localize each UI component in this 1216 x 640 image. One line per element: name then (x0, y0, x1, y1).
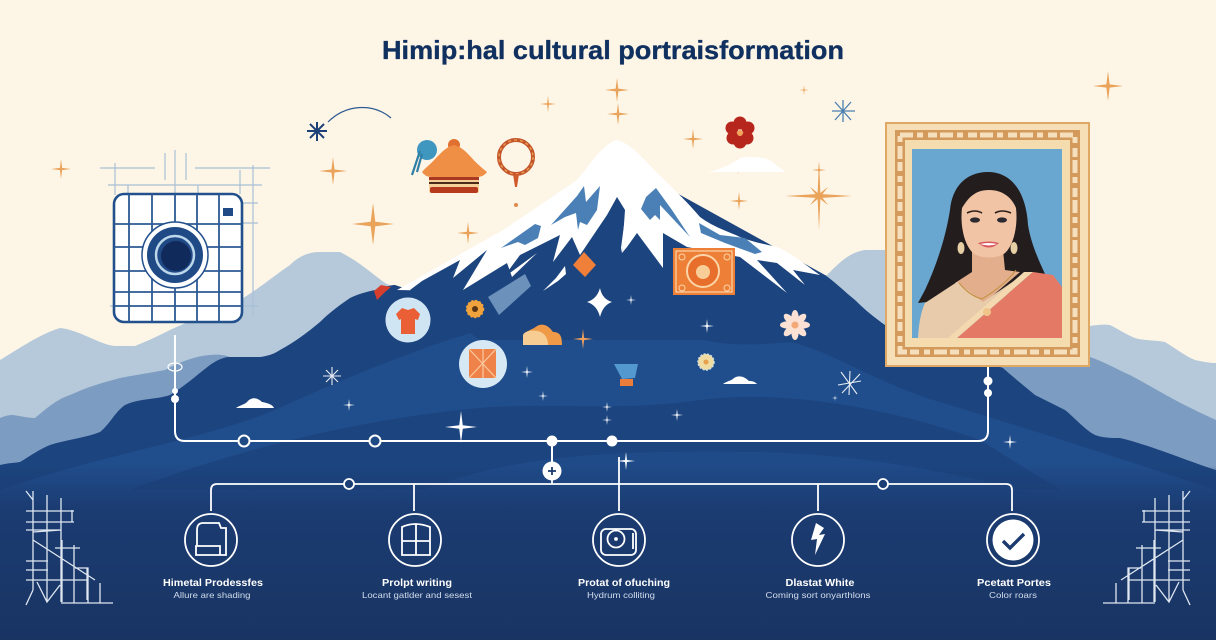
frame ornament (900, 135, 1075, 352)
smile (978, 242, 999, 248)
mountain inner ridges (0, 262, 1216, 640)
step 4 label: Dlastat White (786, 577, 855, 589)
camera body (114, 194, 242, 322)
icon: document (185, 514, 237, 566)
step 1 caption: Allure are shading (174, 590, 251, 600)
viewfinder (223, 208, 233, 216)
step 2 label: Prolpt writing (382, 577, 452, 589)
icon: orange huts (523, 325, 562, 345)
step 2 (362, 514, 473, 600)
timeline nodes (168, 363, 992, 446)
camera with blueprint grid (100, 150, 270, 322)
icon: starbursts (323, 367, 861, 395)
step 1 label: Himetal Prodessfes (163, 577, 263, 589)
dark jagged rock (410, 197, 860, 340)
icon: red flower (726, 116, 754, 148)
icon: textile badge (459, 340, 507, 388)
lower band (0, 465, 1216, 640)
step 5 (977, 514, 1051, 600)
title: Himip:hal cultural portraisformation (382, 35, 844, 65)
icon: blue knot (412, 140, 437, 175)
face (961, 190, 1017, 258)
neck (955, 250, 1020, 304)
step 3 (578, 514, 670, 600)
step 3 caption: Hydrum colliting (587, 590, 655, 600)
icon: comet with star (307, 107, 391, 141)
plus node (542, 462, 562, 480)
icon: yellow flower (466, 300, 484, 318)
icon: red bird (374, 285, 391, 300)
blouse (918, 272, 1027, 338)
icon: orange hat (422, 139, 487, 193)
step 5 label: Pcetatt Portes (977, 577, 1051, 589)
sari border (948, 272, 1033, 338)
frame moulding (885, 122, 1090, 367)
hair (918, 172, 1052, 303)
step 5 caption: Color roars (989, 590, 1037, 600)
icon: shirt badge (386, 298, 430, 342)
sparkles on mountain (343, 288, 1017, 470)
step 1 (163, 514, 263, 600)
lower timeline (211, 457, 1012, 511)
upper timeline (168, 335, 992, 462)
back mountain range (0, 250, 1216, 640)
icon: bead necklace (499, 140, 533, 207)
step 4 (766, 514, 870, 600)
main mountain (0, 140, 1216, 640)
icon: orange diamond (573, 252, 596, 277)
icon: woven blue patch (488, 274, 531, 315)
portrait photo (912, 149, 1062, 338)
icon: pink flower (780, 310, 810, 340)
snow cap (397, 140, 820, 295)
portrait frame (885, 122, 1090, 367)
eyes and brows (967, 211, 1011, 223)
icon: pale flower (698, 354, 714, 370)
step 3 label: Protat of ofuching (578, 577, 670, 589)
step 4 caption: Coming sort onyarthlons (766, 590, 870, 600)
blue shadows on snow (501, 186, 762, 254)
icon: camera (593, 514, 645, 566)
earrings (958, 242, 1018, 254)
icon: check (987, 514, 1039, 566)
icon: clouds on mountain (236, 376, 757, 408)
sparkles on sky (51, 71, 1123, 245)
sari (957, 272, 1062, 338)
icon: cloud on sky (707, 157, 785, 172)
scaffold left (26, 491, 113, 605)
icon: lightning (792, 514, 844, 566)
tile: orange patterned (673, 248, 735, 295)
snow flecks (543, 210, 626, 291)
icon: blue lantern (614, 364, 638, 386)
mountain body (0, 160, 1216, 640)
step 2 caption: Locant gatlder and sesest (362, 590, 473, 600)
blueprint guide lines (100, 150, 270, 317)
icon: blue snowflake (832, 100, 855, 122)
camera grid (114, 194, 242, 322)
portrait background (912, 149, 1062, 338)
necklace (959, 270, 1016, 299)
camera lens (142, 222, 208, 288)
scaffold right (1103, 491, 1190, 605)
icon: window (389, 514, 441, 566)
